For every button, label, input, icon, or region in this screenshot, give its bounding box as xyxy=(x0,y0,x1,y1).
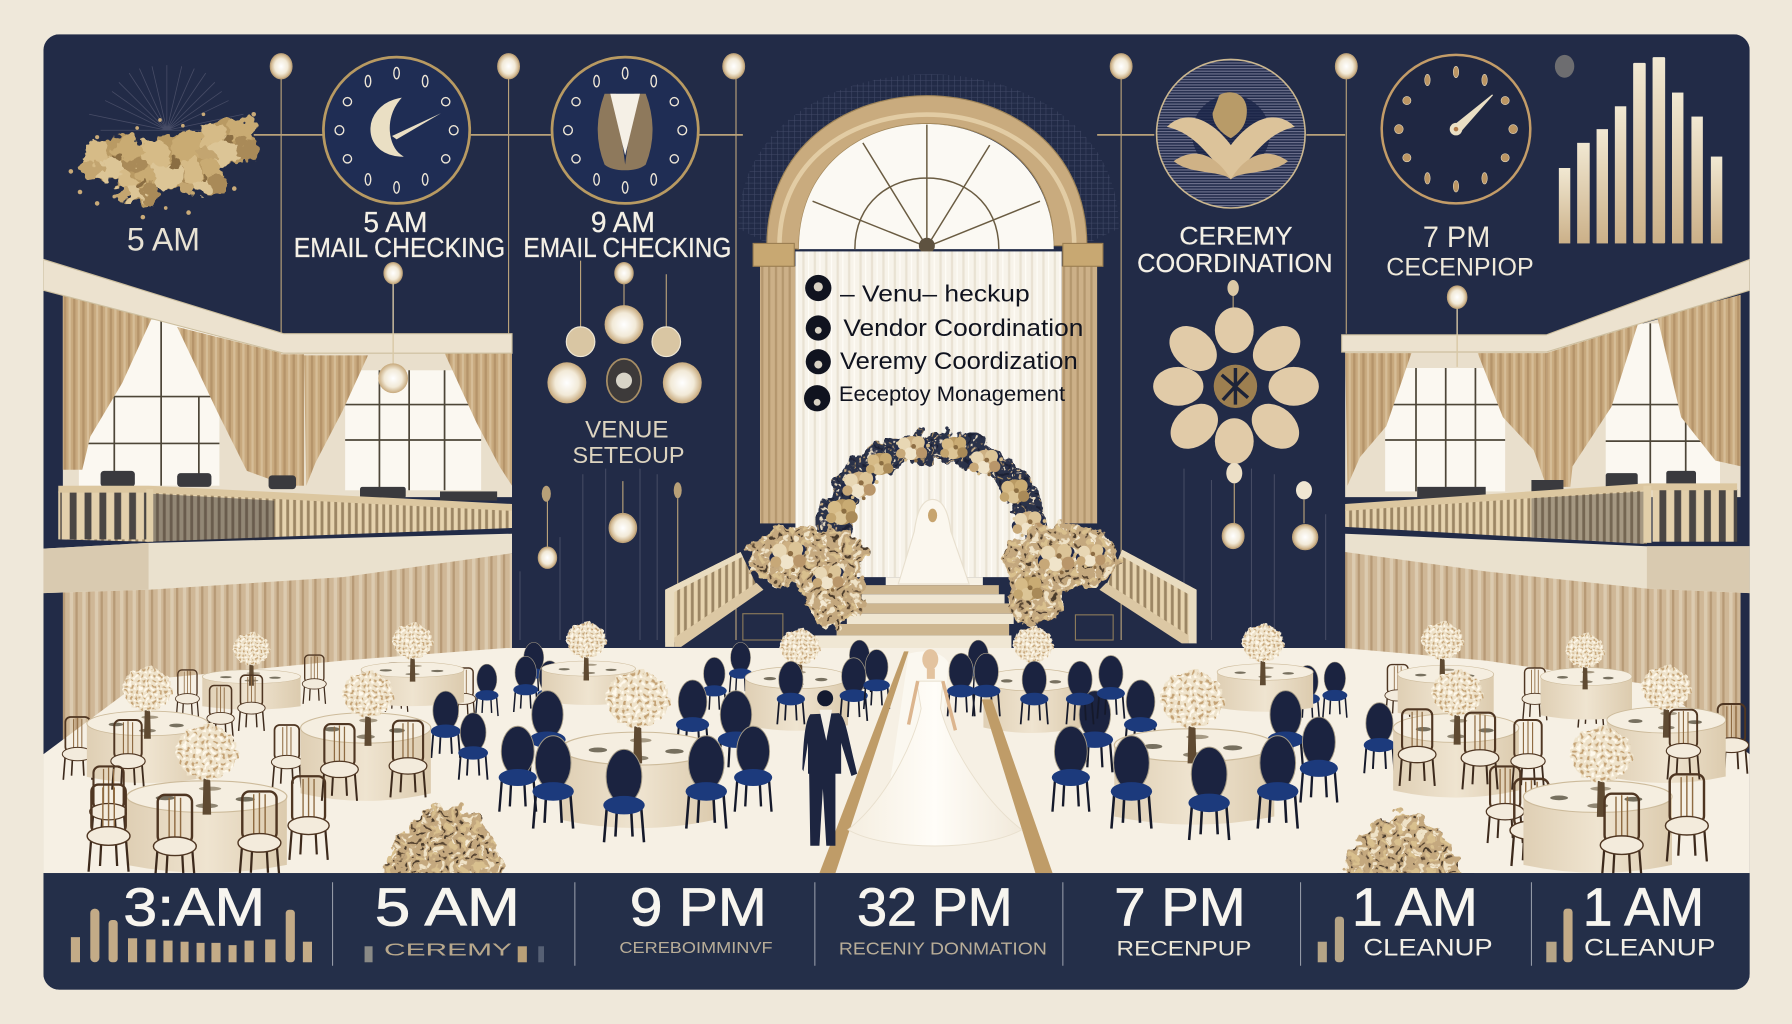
label: 7 PM reception: 7 PM xyxy=(1423,221,1490,254)
left windows xyxy=(79,320,481,490)
bar sculpture xyxy=(1559,57,1722,243)
wall decor hairlines xyxy=(520,469,1326,640)
floral arch xyxy=(747,436,1118,629)
floral wall ornament xyxy=(69,65,260,219)
right curtains xyxy=(1345,295,1741,487)
right mezzanine xyxy=(1342,259,1750,754)
slot: 9 PM xyxy=(619,878,773,957)
veil figure xyxy=(898,499,969,584)
lotus medallion xyxy=(1157,59,1305,208)
venue setup ornament xyxy=(547,261,702,403)
schedule list: Eeceptoy Monagement xyxy=(839,381,1065,406)
label: 5 AM email checking: EMAIL CHECKING xyxy=(294,232,505,263)
pendant lamp xyxy=(378,262,408,393)
slot: 1 AM cleanup: 1 AM xyxy=(1352,878,1478,938)
slot: 1 AM cleanup second: 1 AM xyxy=(1583,878,1704,938)
label: 5 AM email checking xyxy=(296,212,504,258)
left column xyxy=(760,266,795,523)
label: venue setup: VENUE xyxy=(585,417,669,444)
label: 9 AM email checking xyxy=(525,212,730,258)
ballroom floor xyxy=(43,648,1750,873)
label: 9 AM email checking: 9 AM xyxy=(591,207,655,239)
pendant lamp right xyxy=(1447,286,1467,367)
slot: 5 AM ceremony: CEREMY xyxy=(384,939,513,959)
slot: 1 AM cleanup xyxy=(1318,878,1493,962)
drape panel xyxy=(795,251,1062,577)
clock: crescent 5 AM xyxy=(323,57,470,203)
slot: 12 PM: RECENIY DONMATION xyxy=(839,938,1047,958)
right desk items xyxy=(1417,471,1696,498)
schedule list: Vendor Coordination xyxy=(843,315,1083,342)
left banister xyxy=(665,552,757,642)
schedule list: Veremy Coordization xyxy=(840,348,1078,375)
label: 7 PM reception xyxy=(1386,221,1534,281)
top bulbs xyxy=(270,54,1574,79)
left mezzanine xyxy=(43,259,512,754)
left desk items xyxy=(101,471,497,501)
clock: tuxedo 9 AM xyxy=(552,57,698,203)
label: 5 AM: 5 AM xyxy=(127,221,200,257)
right balcony xyxy=(1345,483,1750,593)
label: venue setup: SETEOUP xyxy=(573,442,685,468)
right lower wall xyxy=(1345,552,1741,754)
slot: 1 AM cleanup second xyxy=(1546,878,1715,962)
right tables xyxy=(1364,667,1749,881)
left balcony xyxy=(43,486,512,593)
slot: 9 PM: 9 PM xyxy=(630,878,767,938)
slot: 1 AM cleanup: CLEANUP xyxy=(1363,934,1493,961)
centre-left table xyxy=(499,671,772,842)
label: 5 AM email checking: 5 AM xyxy=(363,207,427,239)
right banister xyxy=(1106,550,1197,643)
slot: 12 PM: 32 PM xyxy=(857,878,1013,938)
right moulding xyxy=(1342,259,1750,352)
connector lines xyxy=(254,75,1346,640)
arch halo lattice xyxy=(738,74,1119,243)
slot: 7 PM reception: 7 PM xyxy=(1114,878,1246,938)
back tables xyxy=(175,623,1632,733)
gold aisle xyxy=(819,651,1053,873)
left lower wall xyxy=(63,553,512,754)
centre-right table xyxy=(777,650,1338,840)
bride xyxy=(848,649,1022,846)
label: ceremony coordination: CEREMY xyxy=(1179,223,1293,251)
schedule list xyxy=(804,275,1083,411)
lower lamps left xyxy=(538,481,682,584)
petal flower ornament xyxy=(1153,280,1319,464)
schedule list: – Venu– heckup xyxy=(840,281,1030,307)
steps xyxy=(815,577,1014,650)
clock: 7 PM xyxy=(1382,55,1530,203)
staircase xyxy=(665,550,1197,650)
bottom timeline band xyxy=(43,873,1750,990)
right windows xyxy=(1385,323,1720,491)
label: 7 PM reception: CECENPIOP xyxy=(1386,253,1534,281)
arch window xyxy=(799,124,1054,254)
central arch xyxy=(738,74,1119,577)
lower lamps right xyxy=(1222,463,1318,550)
label: ceremony coordination xyxy=(1137,223,1333,278)
slot: 1 AM cleanup second: CLEANUP xyxy=(1584,934,1715,961)
label: venue setup xyxy=(574,421,684,463)
slot: 12 PM xyxy=(839,878,1047,958)
label: 9 AM email checking: EMAIL CHECKING xyxy=(523,232,731,263)
left tables xyxy=(62,668,488,882)
floor bouquets xyxy=(377,807,1474,887)
right column xyxy=(1062,266,1097,523)
slot: 7 PM reception: RECENPUP xyxy=(1117,935,1251,960)
dividers xyxy=(333,882,1531,966)
slot: 7 PM reception xyxy=(1114,878,1251,960)
left moulding xyxy=(43,259,512,353)
label: ceremony coordination: COORDINATION xyxy=(1137,248,1333,278)
arch frame xyxy=(767,96,1087,249)
groom xyxy=(802,690,857,846)
left curtains xyxy=(63,295,512,486)
slot: 5 AM ceremony xyxy=(365,878,544,962)
slot: 5 AM ceremony: 5 AM xyxy=(375,878,520,938)
slot: 9 PM: CEREBOIMMINVF xyxy=(619,940,773,957)
mini bars xyxy=(71,909,312,962)
slot: 3 AM: 3:AM xyxy=(123,878,265,938)
